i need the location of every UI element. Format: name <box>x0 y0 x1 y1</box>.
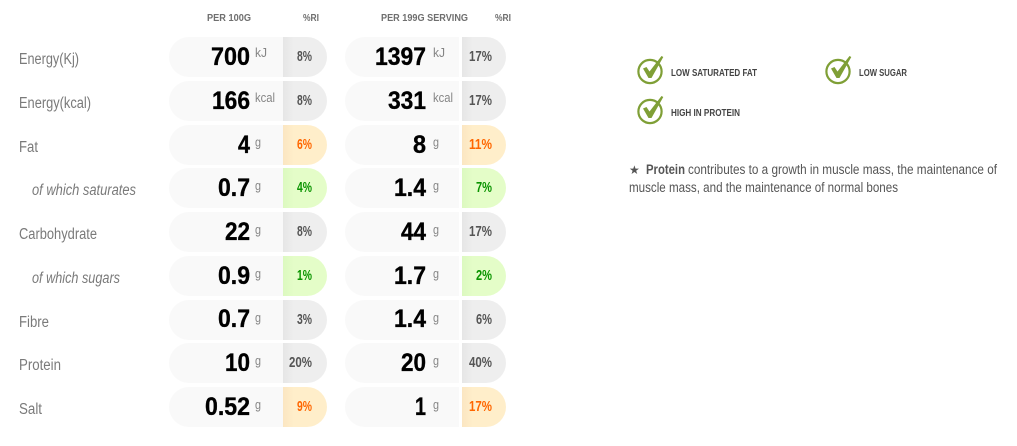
row: Energy(kcal): 166 <box>212 87 250 115</box>
row: Salt: 9% <box>297 398 312 415</box>
row: of which sugars: of which sugars <box>32 270 120 287</box>
row: of which sugars: g <box>433 266 439 281</box>
row: Salt: Salt <box>19 401 43 418</box>
row: Fibre: 0.7 <box>218 305 250 333</box>
row: of which sugars: 0.9 <box>218 262 250 290</box>
row: Protein <box>19 343 506 383</box>
row: Energy(kcal): kcal <box>433 90 453 105</box>
row: Fibre: Fibre <box>19 314 49 331</box>
row: Fibre <box>19 300 506 340</box>
row: Salt: 17% <box>469 398 492 415</box>
column headers: PER 199G SERVING <box>381 12 468 24</box>
row: Fat: g <box>255 134 261 150</box>
label: low sugar: LOW SUGAR <box>859 67 907 79</box>
row: of which saturates: g <box>255 178 261 193</box>
row: Fat <box>19 125 506 165</box>
row: Energy(Kj) <box>19 37 506 77</box>
column headers: PER 100G <box>207 12 251 24</box>
row: Carbohydrate: 8% <box>297 223 312 240</box>
row: of which saturates: g <box>433 178 439 193</box>
row: Fat: g <box>433 134 439 150</box>
row: Fat: 8 <box>413 131 426 159</box>
row: Carbohydrate: 22 <box>225 218 250 246</box>
label: high in protein: HIGH IN PROTEIN <box>671 107 740 119</box>
row: of which sugars: 1% <box>297 267 312 284</box>
protein claim text: muscle mass, and the maintenance of normal bones <box>629 180 898 195</box>
row: Energy(Kj): kJ <box>255 45 267 60</box>
row: Protein: 20% <box>289 354 312 371</box>
row: Protein: 40% <box>469 354 492 371</box>
row: of which sugars: g <box>255 266 261 281</box>
row: Fibre: g <box>255 310 261 325</box>
row: Fibre: 3% <box>297 311 312 328</box>
row: Energy(Kj): 1397 <box>375 43 426 71</box>
row: Protein: Protein <box>19 357 61 374</box>
row: of which sugars <box>32 256 506 296</box>
row: Protein: 20 <box>401 349 426 377</box>
row: Salt: 0.52 <box>205 393 250 421</box>
row: Energy(Kj): 17% <box>469 48 492 65</box>
row: Salt <box>19 387 506 427</box>
row: Energy(kcal) <box>19 81 506 121</box>
row: Energy(Kj): kJ <box>433 45 445 60</box>
column headers: %RI <box>495 12 511 24</box>
row: Salt: 1 <box>415 393 426 421</box>
row: Fibre: 1.4 <box>394 305 426 333</box>
icon: check low saturated fat <box>638 56 663 83</box>
row: Carbohydrate: Carbohydrate <box>19 226 97 243</box>
row: Energy(kcal): kcal <box>255 90 275 105</box>
row: of which saturates: 0.7 <box>218 174 250 202</box>
row: Fat: 4 <box>238 131 250 159</box>
row: of which saturates: 1.4 <box>394 174 426 202</box>
row: Fibre: g <box>433 310 439 325</box>
row: Energy(Kj): 8% <box>297 48 312 65</box>
label: low saturated fat: LOW SATURATED FAT <box>671 67 757 79</box>
row: Carbohydrate <box>19 212 506 252</box>
row: of which sugars: 1.7 <box>394 262 426 290</box>
row: Energy(Kj): Energy(Kj) <box>19 51 79 68</box>
protein claim text: ★ <box>629 163 640 177</box>
row: of which saturates: 7% <box>476 179 492 196</box>
row: Salt: g <box>255 397 261 412</box>
row: Carbohydrate: 17% <box>469 223 492 240</box>
row: Fat: 6% <box>297 136 312 153</box>
column headers <box>207 12 511 24</box>
row: Energy(kcal): 17% <box>469 92 492 109</box>
protein claim text: Protein <box>646 162 685 177</box>
row: Salt: g <box>433 397 439 412</box>
icon: check high in protein <box>638 96 663 123</box>
row: Fat: Fat <box>19 139 39 156</box>
row: Protein: g <box>255 353 261 368</box>
row: Carbohydrate: g <box>433 222 439 237</box>
row: Energy(Kj): 700 <box>211 43 250 71</box>
column headers: %RI <box>303 12 319 24</box>
row: Fibre: 6% <box>476 311 492 328</box>
row: Fat: 11% <box>469 136 492 153</box>
row: Energy(kcal): 8% <box>297 92 312 109</box>
row: Energy(kcal): 331 <box>388 87 426 115</box>
row: of which saturates <box>32 168 506 208</box>
row: of which sugars: 2% <box>476 267 492 284</box>
row: Energy(kcal): Energy(kcal) <box>19 95 91 112</box>
icon: check low sugar <box>826 56 851 83</box>
protein claim text <box>629 162 997 195</box>
row: Protein: g <box>433 353 439 368</box>
row: of which saturates: 4% <box>297 179 312 196</box>
row: Carbohydrate: 44 <box>401 218 426 246</box>
row: of which saturates: of which saturates <box>32 182 136 199</box>
row: Protein: 10 <box>225 349 250 377</box>
row: Carbohydrate: g <box>255 222 261 237</box>
